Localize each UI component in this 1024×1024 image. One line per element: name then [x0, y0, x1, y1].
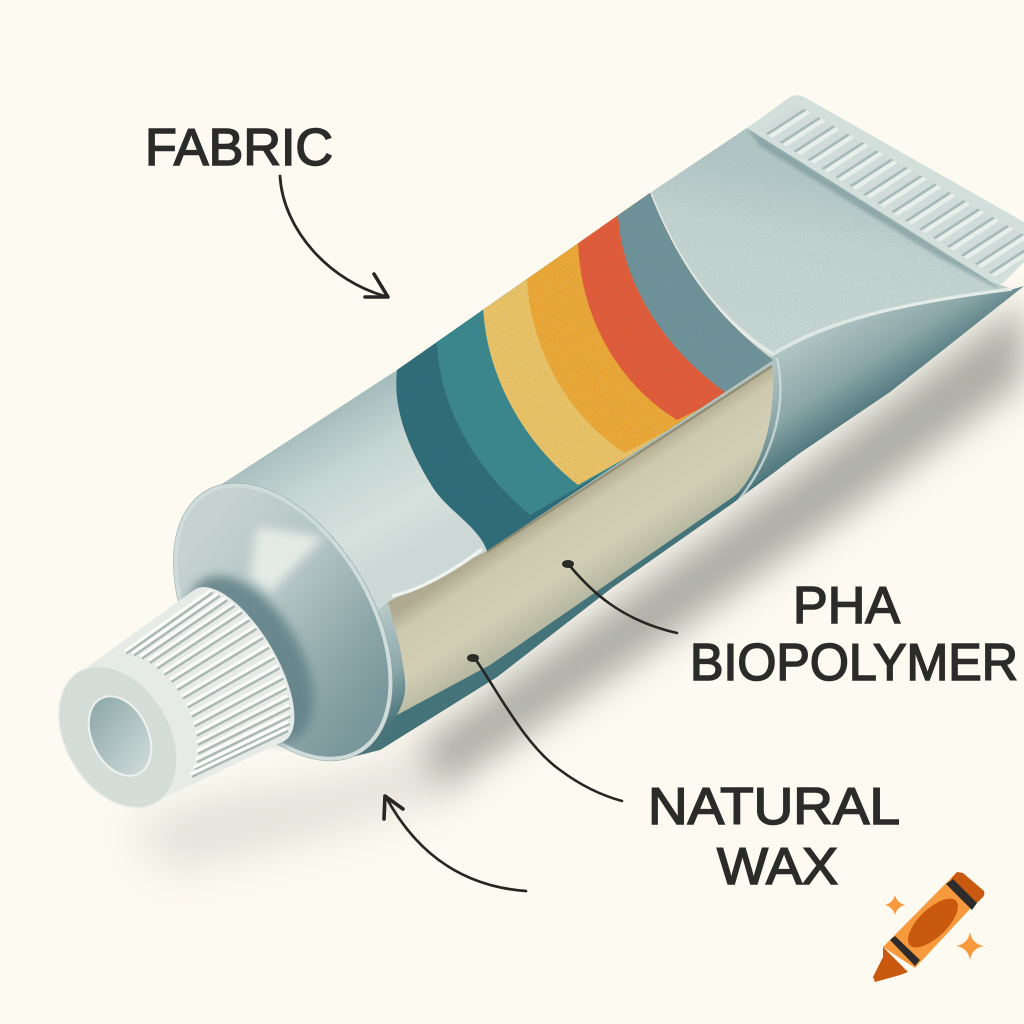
- layer: pale yellow: [483, 193, 773, 485]
- label: natural wax: [648, 778, 900, 896]
- crimp shadow line: [747, 128, 1000, 290]
- cut-away rim highlight: [738, 358, 780, 501]
- body rim highlight: [392, 549, 482, 596]
- tube upper body: [205, 128, 800, 640]
- side wall grain: [733, 286, 1024, 503]
- crimp seal: [747, 95, 1024, 284]
- crimp end face: [650, 128, 1012, 354]
- leader: natural wax: [467, 654, 622, 801]
- tube illustration: [35, 95, 1024, 829]
- layer: amber: [527, 193, 773, 453]
- layer: grey: [618, 193, 773, 392]
- label: PHA biopolymer: BIOPOLYMER: [690, 634, 1018, 692]
- fold highlight: [650, 193, 1012, 354]
- label: PHA biopolymer: [690, 577, 1018, 692]
- cap ribbed side: [73, 571, 316, 813]
- label: fabric: FABRIC: [145, 119, 333, 177]
- shoulder highlight: [250, 527, 323, 593]
- cut-away beige filling: [388, 365, 773, 715]
- label: natural wax: NATURAL: [648, 778, 900, 836]
- fabric grain: [396, 193, 773, 551]
- arrow: fabric: [280, 176, 388, 297]
- icon: crayon watermark: [873, 872, 984, 982]
- body grain: [650, 128, 1012, 354]
- layer: teal: [437, 193, 768, 515]
- layer: dark teal: [396, 193, 772, 551]
- fabric layers: [396, 193, 773, 551]
- shoulder: [128, 445, 438, 799]
- lower edge strip: [380, 468, 780, 750]
- cap front face: [35, 645, 201, 829]
- cap: [35, 571, 316, 829]
- arrow: bottom: [384, 796, 526, 891]
- crimp ribs: [760, 105, 1024, 277]
- tube lower side wall: [340, 286, 1024, 760]
- neck shadow: [160, 554, 340, 764]
- label: PHA biopolymer: PHA: [793, 577, 900, 635]
- icon: sparkle large: [956, 932, 984, 960]
- icon: sparkle small: [885, 895, 905, 915]
- leader: PHA biopolymer: [562, 560, 677, 633]
- cap rib shadows: [117, 582, 311, 785]
- layer: red: [578, 193, 773, 420]
- label: natural wax: WAX: [717, 838, 838, 896]
- cap rib highlights: [115, 580, 309, 782]
- shade edge of fabric: [487, 366, 772, 552]
- tube shadow: [130, 300, 1024, 870]
- cap hole: [76, 686, 164, 786]
